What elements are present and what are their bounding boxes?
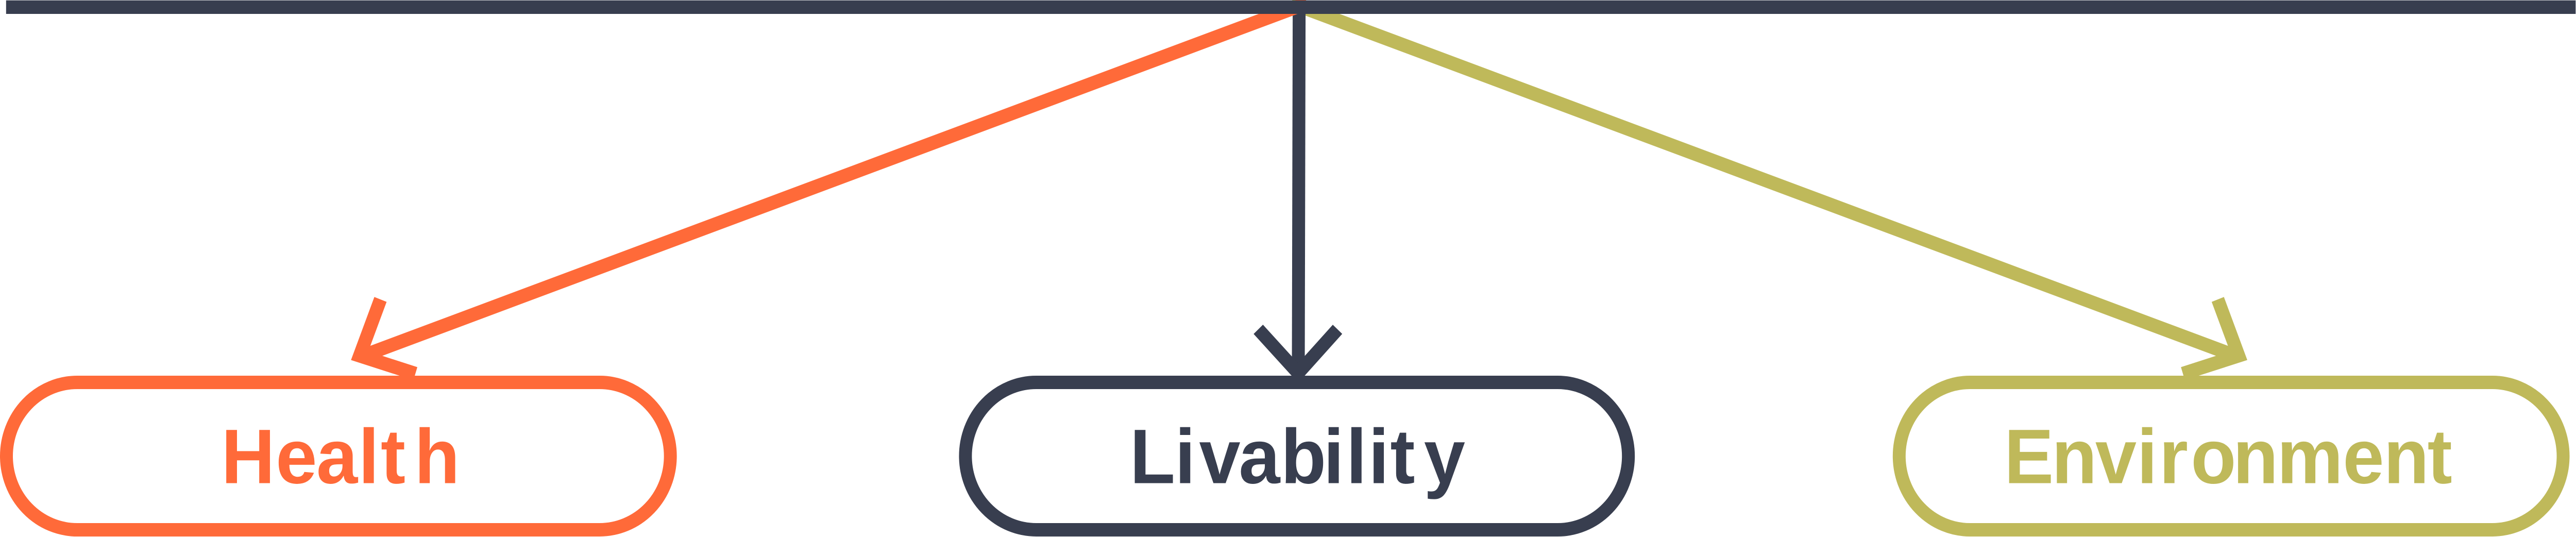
label: Health: Health — [222, 414, 460, 500]
label: Environment: Environment — [2004, 414, 2452, 500]
panel: Livability — [965, 382, 1629, 530]
pill outline: Environment — [1899, 382, 2563, 530]
panel: Health — [6, 382, 670, 530]
pill outline: Livability — [965, 382, 1629, 530]
arrow: to Livability — [1258, 10, 1337, 379]
arrow: to Health — [360, 3, 1307, 374]
panel: Environment — [1899, 382, 2563, 530]
arrow: to Environment — [1291, 3, 2239, 374]
top bar — [6, 1, 2575, 14]
pill outline: Health — [6, 382, 670, 530]
label: Livability: Livability — [1130, 414, 1465, 500]
